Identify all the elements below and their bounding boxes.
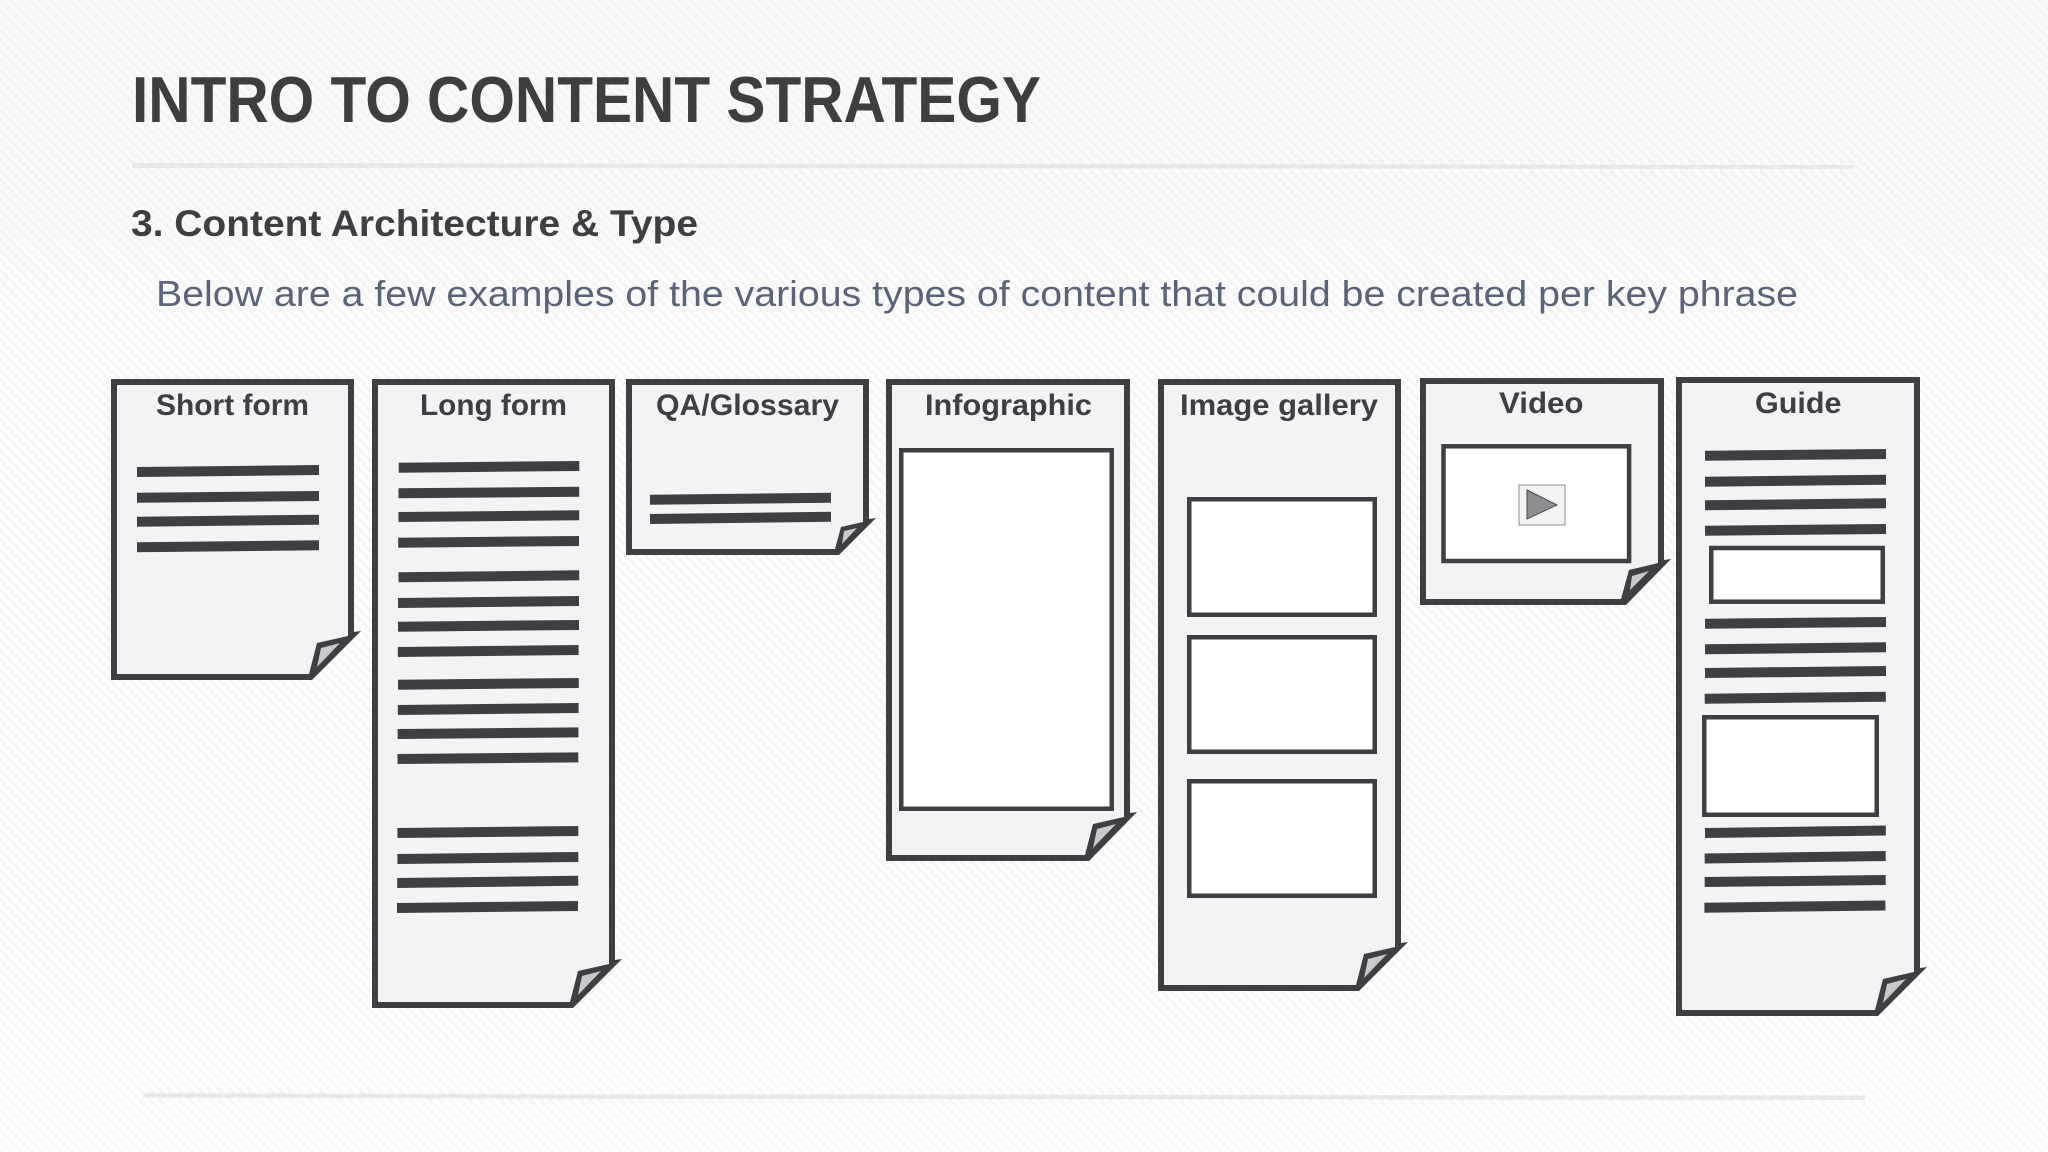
heading: long form: Long form bbox=[420, 389, 567, 422]
heading: guide: Guide bbox=[1755, 387, 1842, 420]
text lines bbox=[397, 466, 579, 908]
panel: video bbox=[1420, 378, 1671, 605]
icon: play button bbox=[1519, 485, 1565, 525]
text lines bbox=[1704, 454, 1886, 908]
image placeholders bbox=[1704, 548, 1883, 815]
section heading: 3. Content Architecture & Type bbox=[131, 203, 698, 244]
panel: short form bbox=[111, 379, 361, 680]
panel: infographic bbox=[886, 379, 1137, 861]
image placeholders bbox=[1189, 499, 1375, 896]
heading: short form: Short form bbox=[156, 389, 309, 422]
title: INTRO TO CONTENT STRATEGY bbox=[132, 63, 1041, 136]
panel: image gallery bbox=[1158, 379, 1408, 991]
text lines bbox=[137, 470, 319, 547]
text lines bbox=[650, 498, 831, 519]
heading: video: Video bbox=[1499, 387, 1584, 420]
heading: QA/glossary: QA/Glossary bbox=[656, 389, 839, 422]
intro text: Below are a few examples of the various types of content that could be created per key phrase bbox=[156, 273, 1798, 314]
panel: long form bbox=[372, 379, 622, 1008]
panel: QA/glossary bbox=[626, 379, 876, 555]
image placeholder bbox=[901, 450, 1112, 809]
heading: infographic: Infographic bbox=[925, 389, 1092, 422]
video frame bbox=[1444, 446, 1629, 561]
panel: guide bbox=[1676, 377, 1927, 1016]
heading: image gallery: Image gallery bbox=[1180, 389, 1378, 422]
